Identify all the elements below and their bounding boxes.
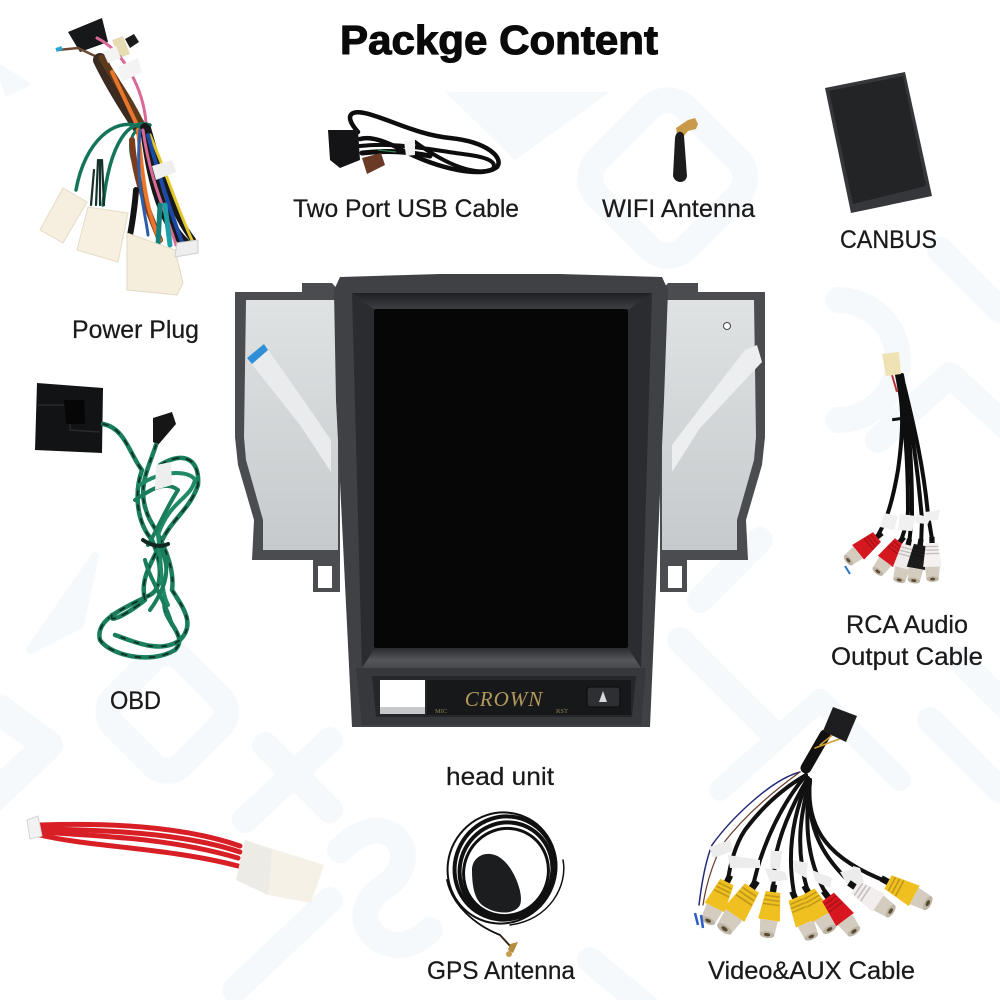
brand text: CROWN [465, 687, 543, 711]
RST label: RST [556, 708, 568, 715]
component: two port USB cable [293, 112, 519, 223]
control panel [356, 668, 646, 725]
screen recess [352, 293, 652, 668]
label: two port USB cable: Two Port USB Cable [293, 195, 519, 223]
component: video and AUX cable [695, 707, 936, 985]
component: GPS antenna [427, 793, 576, 985]
label: CANBUS: CANBUS [840, 226, 937, 254]
label: video and AUX cable: Video&AUX Cable [708, 957, 915, 985]
bezel [334, 274, 668, 727]
label: WIFI antenna: WIFI Antenna [602, 195, 755, 223]
right mounting bracket [660, 283, 765, 592]
label: RCA audio output cable [831, 611, 983, 671]
title: Packge Content [340, 17, 658, 63]
component: OBD cable [35, 383, 198, 715]
component: head unit with side brackets [235, 274, 765, 791]
label: OBD: OBD [110, 687, 161, 715]
label: GPS antenna: GPS Antenna [427, 957, 575, 985]
MIC label: MIC [435, 708, 447, 715]
left mounting bracket [235, 283, 340, 592]
label: RCA audio output cable: Output Cable [831, 643, 983, 671]
label: head unit: head unit [446, 763, 554, 791]
label: power plug: Power Plug [72, 316, 199, 344]
component: CANBUS box [825, 72, 937, 254]
component: RCA audio output cable [831, 352, 983, 671]
component: WIFI antenna [602, 118, 755, 223]
label: RCA audio output cable: RCA Audio [846, 611, 968, 639]
component: red power cable [27, 816, 324, 903]
component: power plug harness [40, 18, 199, 344]
